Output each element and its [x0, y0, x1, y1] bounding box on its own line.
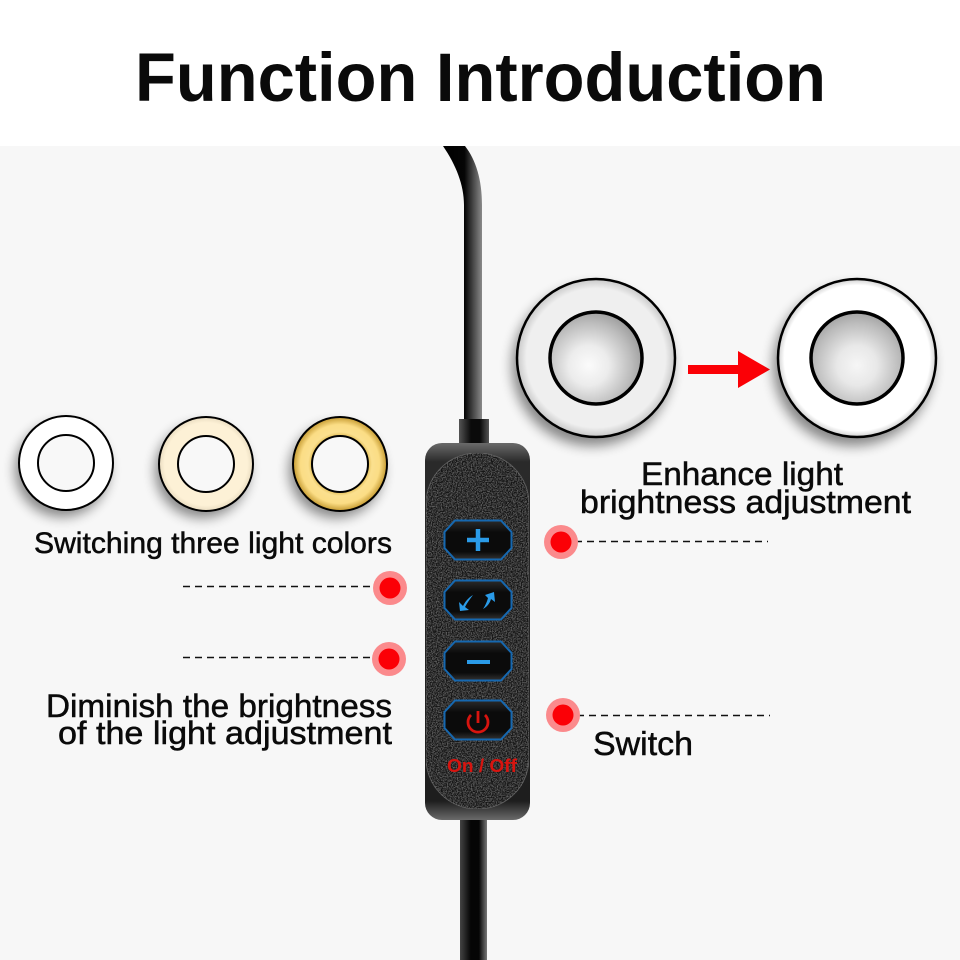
label: diminish brightness: of the light adjustment: [58, 715, 392, 751]
icon: dim ring: [512, 279, 675, 446]
icon: white light ring: [15, 416, 113, 517]
callout: diminish line: [183, 642, 406, 676]
icon: upper cable: [443, 146, 482, 420]
icon: bright ring: [773, 279, 936, 446]
label: switching colors: Switching three light colors: [34, 527, 392, 560]
label: diminish brightness: [46, 688, 392, 751]
label: enhance brightness: Enhance light: [641, 456, 843, 492]
callout: switch line: [546, 698, 770, 732]
power button: [444, 700, 512, 740]
controller strain relief: [459, 419, 489, 445]
title: Function Introduction: [135, 39, 826, 116]
on/off label: On / Off: [447, 756, 518, 776]
icon: lower cable: [460, 815, 487, 960]
controller textured face: [426, 453, 529, 809]
icon: yellow light ring: [289, 417, 387, 518]
minus button: [444, 642, 512, 680]
icon: inline remote controller: [425, 419, 530, 820]
label: enhance brightness: [580, 456, 911, 520]
colour switch button: [444, 580, 512, 620]
controller shell: [425, 443, 530, 820]
callout: enhance line: [544, 525, 768, 559]
plus button: [444, 520, 512, 560]
label: diminish brightness: Diminish the brightness: [46, 688, 392, 724]
label: enhance brightness: brightness adjustment: [580, 484, 911, 520]
icon: warm light ring: [155, 417, 253, 518]
callout: colour switch line: [183, 571, 407, 605]
icon: red arrow: [688, 351, 770, 388]
label: switch: Switch: [593, 725, 693, 762]
